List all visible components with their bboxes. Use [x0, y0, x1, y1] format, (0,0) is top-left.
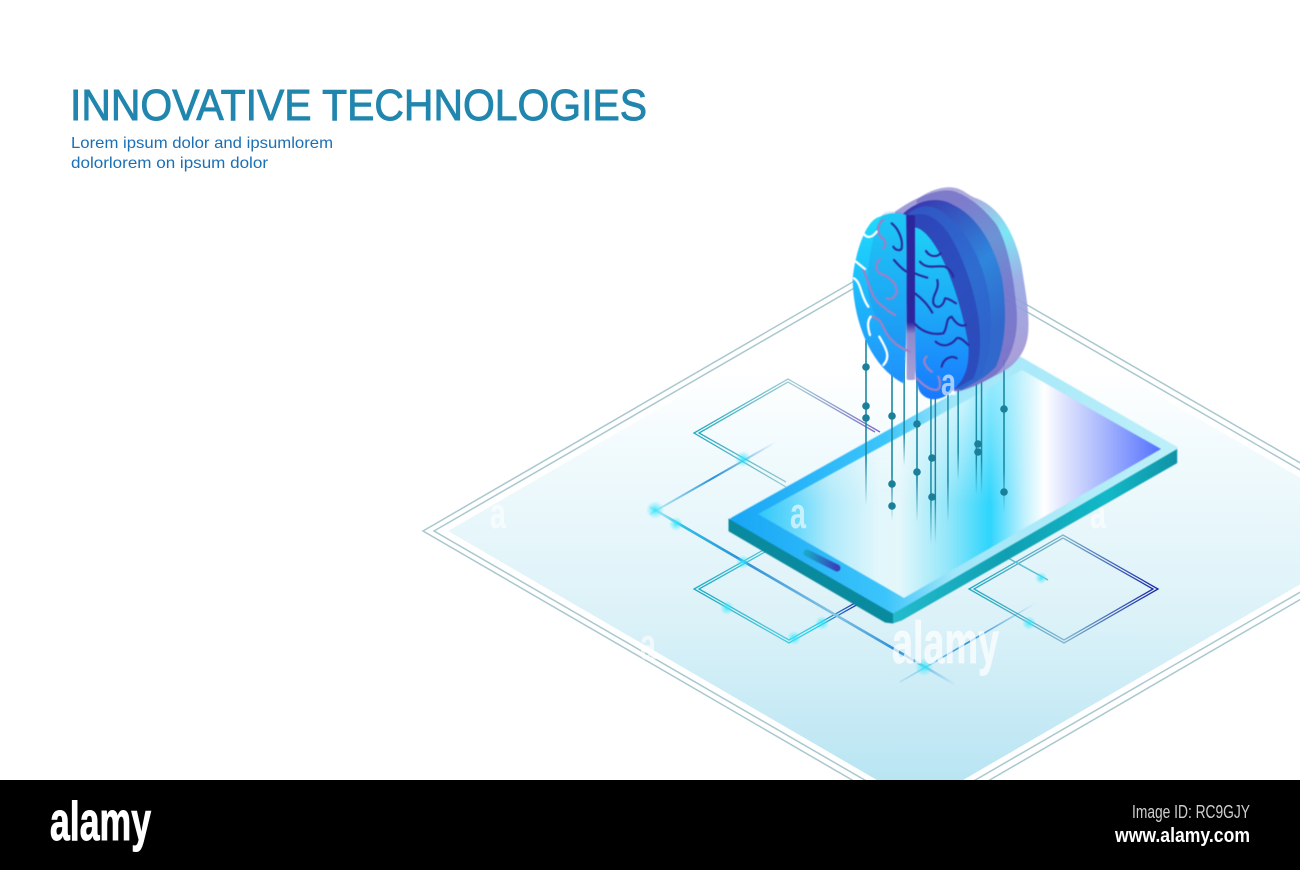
long glowing beam over the phone edge — [646, 501, 956, 685]
watermark letters on platform: a — [1090, 489, 1106, 538]
watermark letters on platform — [490, 489, 1106, 669]
brain: left hemisphere — [853, 213, 907, 383]
circuit square: right — [969, 535, 1158, 643]
brain: centre divide — [907, 215, 915, 380]
brain: left translucent overlap — [867, 212, 907, 352]
watermark on brain and phone: a — [790, 489, 806, 538]
brain: lilac folds — [863, 220, 940, 390]
phone: screen — [758, 370, 1161, 598]
brain: right hemisphere — [915, 227, 969, 399]
watermark on brain and phone: a — [941, 362, 957, 404]
phone: speaker pill — [807, 553, 837, 568]
subtitle text — [71, 135, 333, 172]
glowing circuit lines — [650, 442, 1048, 682]
watermark letters on platform: a — [490, 489, 506, 538]
circuit square: bottom left — [694, 535, 885, 643]
watermark: alamy: alamy — [892, 610, 999, 676]
website: www.alamy.com — [1114, 825, 1250, 847]
subtitle text: Lorem ipsum dolor and ipsumlorem — [71, 135, 333, 152]
subtitle text: dolorlorem on ipsum dolor — [71, 155, 269, 172]
phone: left side — [729, 519, 893, 623]
phone: top rim — [732, 358, 1176, 612]
brain: back layers — [895, 187, 1028, 392]
footer logo: alamy — [50, 790, 151, 852]
smartphone — [729, 358, 1177, 623]
brain: dark folds — [892, 223, 968, 367]
data lines falling from brain — [862, 340, 1008, 544]
brain — [853, 187, 1028, 399]
brain: white folds — [854, 232, 887, 365]
footer bar — [0, 780, 1300, 870]
platform: isometric base — [423, 243, 1300, 820]
title: INNOVATIVE TECHNOLOGIES — [70, 81, 647, 130]
image id: Image ID: RC9GJY — [1132, 802, 1250, 822]
circuit square: top left — [694, 379, 880, 487]
phone: right side — [893, 448, 1177, 623]
watermark on brain and phone — [790, 362, 957, 538]
watermark letters on platform: a — [640, 620, 656, 669]
